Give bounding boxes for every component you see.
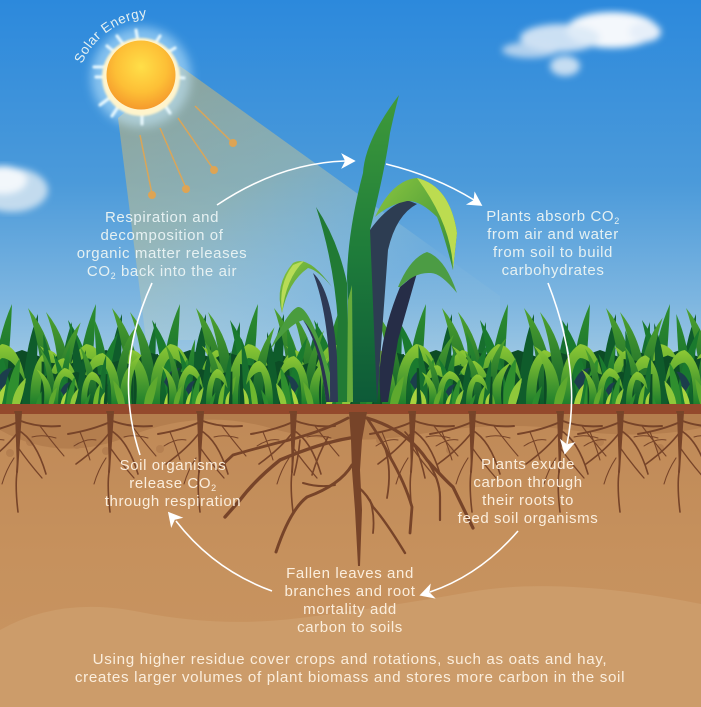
sunlight arrows (140, 106, 237, 199)
text: Solar Energy (74, 10, 146, 62)
cycle arrow: fallen leaves to soil organisms (164, 509, 272, 591)
soil top strip (0, 404, 701, 414)
text: plants exude: Plants exude (481, 456, 575, 473)
text: respiration and decomposition: organic matter releases (77, 245, 247, 262)
light beam (118, 66, 500, 340)
text: respiration and decomposition: decomposition of (100, 227, 224, 244)
text: plants absorb: from soil to build (493, 244, 613, 261)
text: respiration and decomposition: 2 (111, 271, 116, 281)
text: soil organisms: Soil organisms (120, 457, 226, 474)
text: plants absorb: carbohydrates (502, 262, 604, 279)
sky background (0, 0, 701, 404)
soil patches (0, 414, 701, 457)
small root clusters (0, 412, 701, 512)
text: respiration and decomposition: CO (87, 263, 237, 281)
text: fallen leaves: branches and root (284, 583, 416, 600)
text: plants exude: carbon through (473, 474, 583, 491)
central plant (270, 95, 457, 402)
soil background (0, 404, 701, 707)
text: bottom note: creates larger volumes of plant biomass and stores more carbon in the soil (75, 669, 625, 686)
text: plants absorb: from air and water (487, 226, 619, 243)
cloud: upper right (502, 12, 661, 76)
text: soil organisms: through respiration (105, 493, 241, 510)
text: respiration and decomposition: back into the air (116, 263, 237, 280)
cycle arrow: exude to fallen leaves (419, 531, 518, 601)
cycle arrow: plant to absorb (386, 164, 484, 210)
cycle arrow: respiration to plant (217, 155, 354, 205)
solar energy label (82, 17, 157, 64)
sun (91, 27, 191, 127)
text: plants absorb: 2 (614, 216, 620, 226)
cloud: left (0, 166, 48, 212)
cycle arrow: absorb to exude (548, 283, 573, 454)
text: respiration and decomposition: Respiration and (105, 209, 219, 226)
grass band (0, 304, 701, 404)
text: fallen leaves: carbon to soils (297, 619, 403, 636)
text: fallen leaves: mortality add (303, 601, 397, 618)
text: soil organisms: release CO (129, 475, 211, 492)
main root system (220, 412, 473, 566)
text: soil organisms: 2 (211, 483, 217, 493)
text: plants exude: feed soil organisms (458, 510, 598, 527)
text: plants absorb: Plants absorb CO (486, 208, 614, 225)
soil lower layer (0, 586, 701, 707)
text: plants exude: their roots to (482, 492, 574, 509)
text: bottom note: Using higher residue cover crops and rotations, such as oats and hay, (93, 651, 607, 668)
cycle arrow: soil organisms to air (128, 283, 152, 455)
text: fallen leaves: Fallen leaves and (286, 565, 414, 582)
